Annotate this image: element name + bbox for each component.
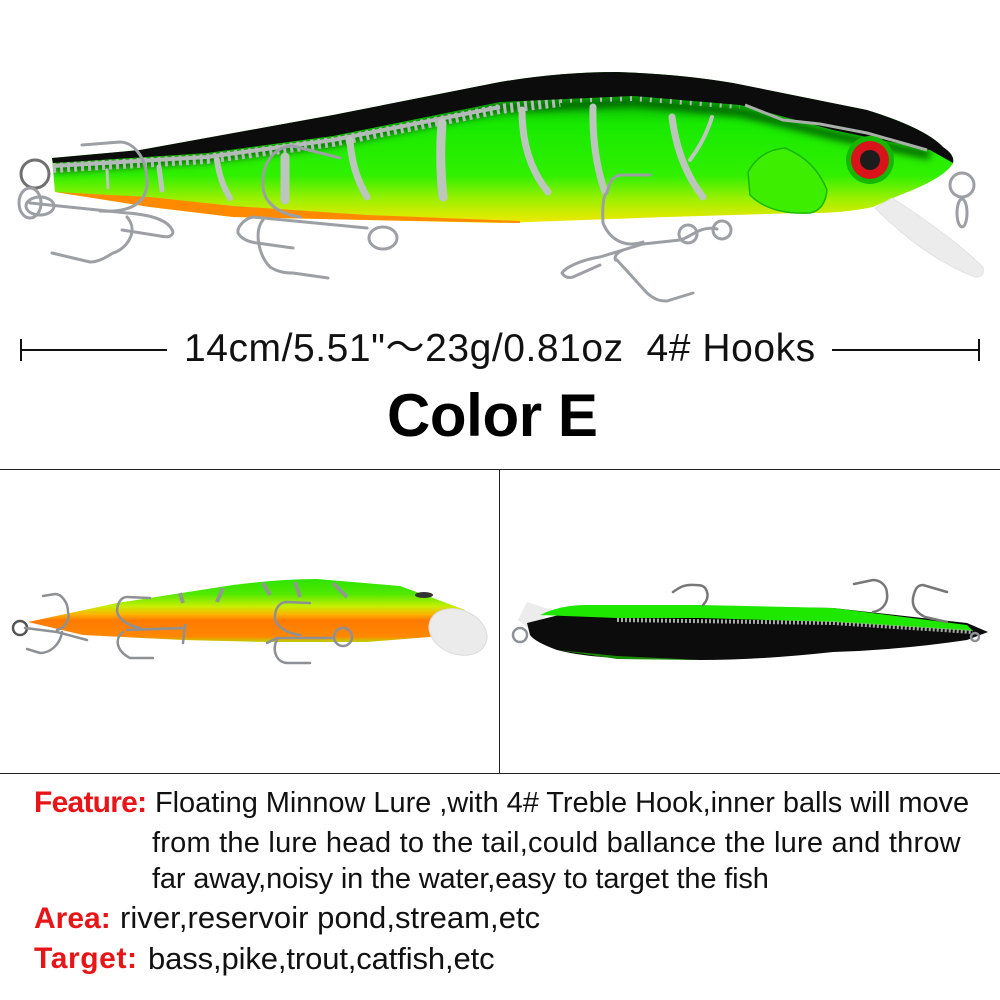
gill plate <box>748 148 827 213</box>
eye <box>846 136 894 184</box>
belly lure stripes <box>180 582 347 603</box>
silver head line <box>745 105 927 150</box>
panel: lure belly view <box>13 579 494 664</box>
belly lure hooks <box>13 594 352 663</box>
feature line 3: far away,noisy in the water,easy to target the fish <box>152 863 769 895</box>
black back <box>52 72 953 163</box>
belly lure body <box>28 579 465 642</box>
belly lure eye <box>415 592 433 598</box>
orange belly <box>55 192 520 223</box>
back lure black underside <box>527 606 988 660</box>
back lure hooks and rings <box>513 580 979 642</box>
silver stripes <box>107 107 712 200</box>
back lure green edge <box>557 650 700 660</box>
silver scale band <box>53 98 740 168</box>
treble hooks and rings <box>19 142 974 301</box>
belly lure lip <box>422 600 494 664</box>
lure body <box>52 72 953 223</box>
back lure silver band <box>617 620 973 632</box>
target text: bass,pike,trout,catfish,etc <box>148 941 495 976</box>
dimension line left <box>21 339 167 361</box>
area text: river,reservoir pond,stream,etc <box>120 900 540 935</box>
dark shading under the back <box>53 102 930 168</box>
main lure photo: side view <box>19 72 983 301</box>
panel: lure back view <box>513 580 988 660</box>
dimension line right <box>832 339 979 361</box>
feature label: Feature: <box>34 786 146 819</box>
area label: Area: <box>34 902 111 935</box>
text block: feature description <box>34 786 969 976</box>
heading: Color E: Color E <box>387 382 598 449</box>
dimensions text: 14cm/5.51"～23g/0.81oz 4# Hooks <box>184 327 816 370</box>
feature line 1: Floating Minnow Lure ,with 4# Treble Hook,inner balls will move <box>155 787 969 819</box>
target label: Target: <box>34 942 138 975</box>
feature line 2: from the lure head to the tail,could ballance the lure and throw <box>152 827 961 859</box>
back lure lip <box>518 602 552 630</box>
diving lip <box>875 198 983 277</box>
back lure green top <box>540 605 973 631</box>
